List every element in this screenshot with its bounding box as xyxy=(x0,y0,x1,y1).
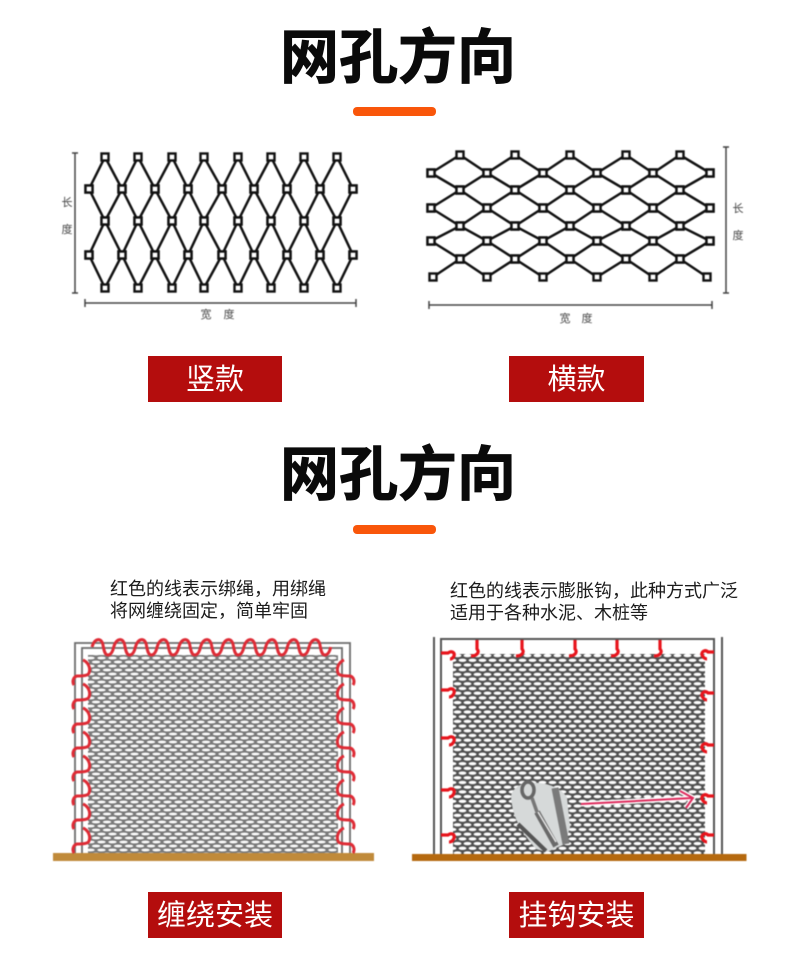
label: horizontal style xyxy=(509,356,644,402)
diagram: vertical mesh: 度 xyxy=(224,307,234,321)
caption: wrap installation: 将网缠绕固定，简单牢固 xyxy=(110,601,308,621)
diagram: horizontal mesh xyxy=(425,146,744,325)
label: hook installation xyxy=(509,892,644,938)
frame xyxy=(75,643,350,853)
caption: wrap installation: 红色的线表示绑绳，用绑绳 xyxy=(110,579,326,599)
ground xyxy=(412,854,746,861)
caption: hook installation xyxy=(450,581,738,623)
diagram: horizontal mesh: 度 xyxy=(582,311,592,325)
caption: hook installation: 红色的线表示膨胀钩，此种方式广泛 xyxy=(450,581,738,601)
ground xyxy=(53,853,374,861)
caption: hook installation: 适用于各种水泥、木桩等 xyxy=(450,603,648,623)
mesh panel xyxy=(453,654,705,854)
orange accent bar: second xyxy=(353,525,436,534)
mesh panel xyxy=(88,655,338,853)
expansion hook bolts xyxy=(511,782,570,852)
title: top heading: 网孔方向 xyxy=(280,25,516,91)
frame xyxy=(434,637,722,854)
red rope: top xyxy=(92,640,331,655)
diagram: horizontal mesh: 长 xyxy=(732,202,744,215)
diagram: horizontal mesh: 度 xyxy=(732,228,744,242)
orange accent bar: top xyxy=(353,107,436,116)
title: second heading: 网孔方向 xyxy=(280,442,516,508)
label: horizontal style: 横款 xyxy=(547,364,606,396)
label: wrap installation xyxy=(148,892,282,938)
diagram: vertical mesh: 长 xyxy=(62,196,72,209)
illustration: wrap installation xyxy=(52,637,375,862)
label: vertical style xyxy=(148,356,282,402)
diagram: vertical mesh xyxy=(61,151,359,321)
label: hook installation: 挂钩安装 xyxy=(518,900,634,932)
label: vertical style: 竖款 xyxy=(186,364,244,396)
red rope: right side xyxy=(337,660,354,853)
red rope: left side xyxy=(73,660,90,853)
illustration: hook installation xyxy=(411,636,748,862)
diagram: vertical mesh: 度 xyxy=(62,222,72,236)
diagram: horizontal mesh: 宽 xyxy=(560,311,570,325)
diagram: vertical mesh: 宽 xyxy=(200,307,212,321)
red hooks xyxy=(441,640,714,842)
caption: wrap installation xyxy=(110,579,326,621)
arrow xyxy=(581,791,693,808)
label: wrap installation: 缠绕安装 xyxy=(157,900,273,932)
